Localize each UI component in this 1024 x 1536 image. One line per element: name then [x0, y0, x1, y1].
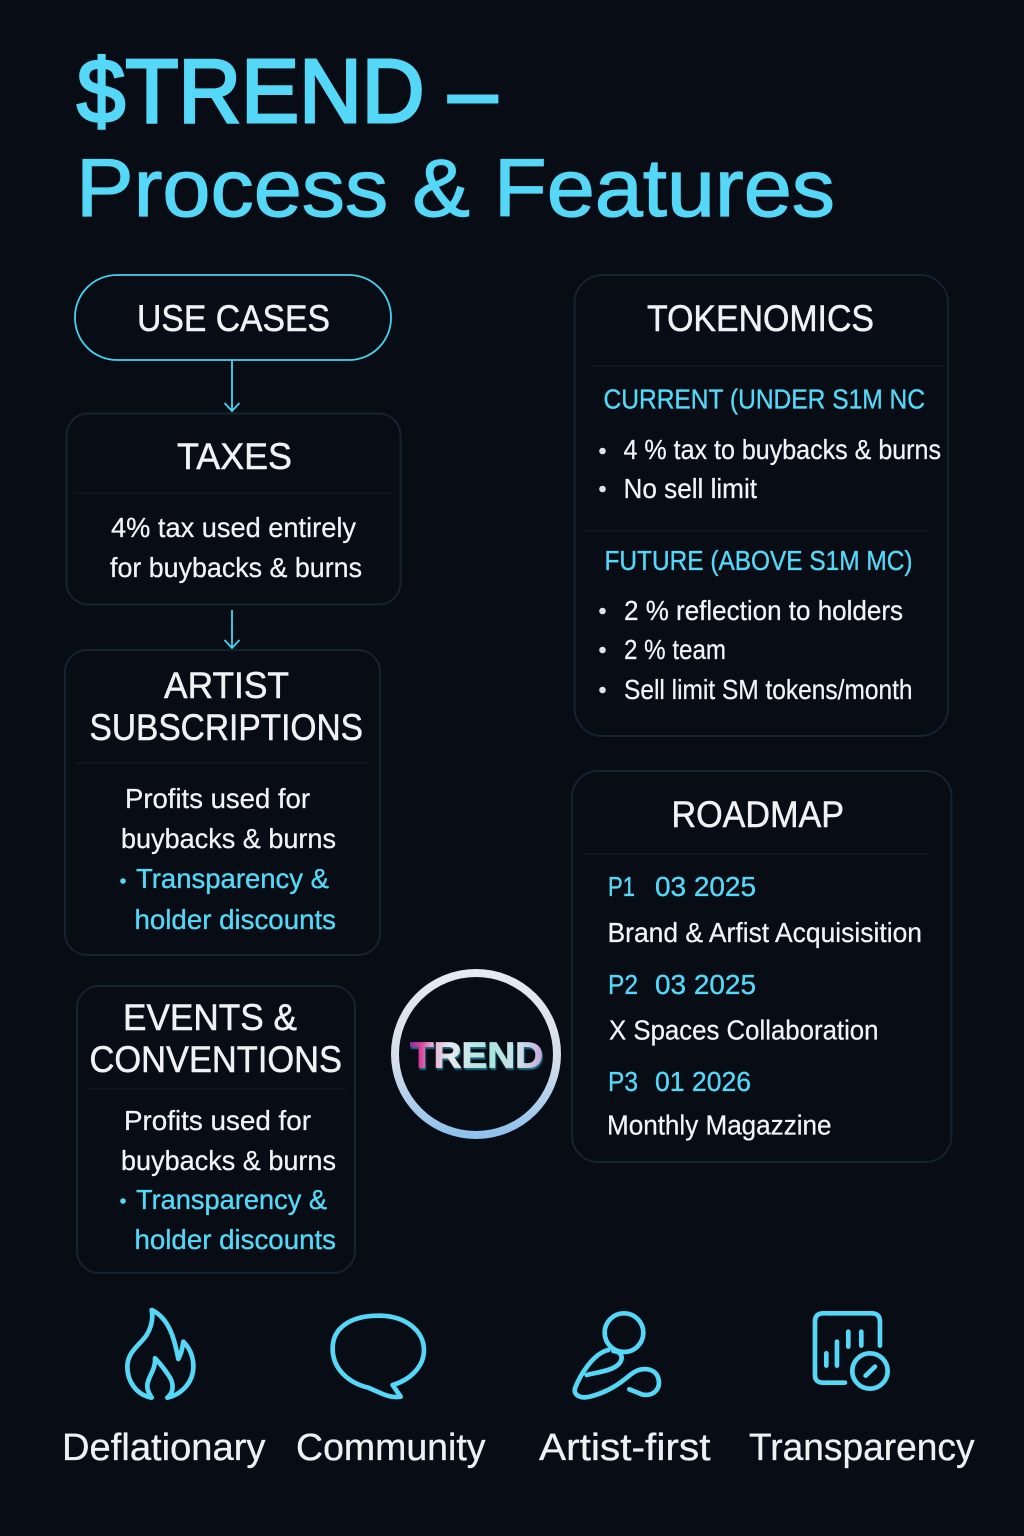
list: future: 2 % reflection to holders	[624, 595, 903, 626]
text: events transparency	[120, 1184, 336, 1255]
heading: events and conventions	[90, 997, 342, 1080]
phase 3: Monthly Magazzine	[607, 1110, 832, 1140]
phase 1	[608, 871, 922, 948]
text: events transparency: Transparency &	[136, 1184, 327, 1215]
heading: roadmap: ROADMAP	[672, 794, 844, 835]
text: events profits: buybacks & burns	[121, 1145, 336, 1176]
heading: events and conventions: EVENTS &	[123, 997, 297, 1038]
heading: events and conventions: CONVENTIONS	[90, 1039, 342, 1080]
text: artist profits: Profits used for	[125, 783, 310, 814]
feature: deflationary: Deflationary	[62, 1427, 266, 1469]
title: $TREND –	[77, 42, 498, 142]
list: current: No sell limit	[624, 473, 757, 504]
use cases pill: USE CASES	[137, 298, 330, 339]
feature: transparency: Transparency	[749, 1427, 974, 1469]
arrow: taxes to artist subscriptions	[224, 610, 240, 648]
text: artist transparency: holder discounts	[134, 904, 336, 935]
panel: tokenomics	[574, 275, 948, 736]
icon: chart with gauge	[815, 1313, 888, 1389]
text: taxes description	[110, 512, 362, 583]
icon: speech bubble	[333, 1316, 424, 1397]
phase 2: P2	[608, 969, 638, 1000]
phase 3: 01 2026	[655, 1066, 751, 1097]
phase 2: X Spaces Collaboration	[609, 1014, 878, 1046]
feature: transparency	[749, 1313, 974, 1469]
list: future: 2 % team	[624, 634, 726, 665]
list: future: Sell limit SM tokens/month	[624, 674, 912, 705]
text: events transparency: holder discounts	[134, 1224, 336, 1255]
subheading: current: CURRENT (UNDER S1M NC	[604, 384, 925, 414]
text: artist profits	[121, 783, 336, 854]
feature: artist-first	[539, 1313, 711, 1469]
phase 1: Brand & Arfist Acquisisition	[608, 917, 922, 948]
heading: artist subscriptions	[90, 665, 363, 748]
title	[76, 42, 835, 234]
feature: artist-first: Artist-first	[539, 1427, 711, 1469]
phase 1: 03 2025	[655, 871, 756, 902]
text: taxes description: for buybacks & burns	[110, 552, 362, 583]
text: taxes description: 4% tax used entirely	[111, 512, 356, 543]
phase 1: P1	[608, 871, 635, 902]
phase 2: 03 2025	[655, 969, 756, 1000]
arrow: use cases to taxes	[224, 360, 240, 411]
panel: taxes	[66, 414, 400, 604]
phase 2	[608, 969, 878, 1046]
text: artist profits: buybacks & burns	[121, 823, 336, 854]
text: events profits	[121, 1105, 336, 1176]
feature: community: Community	[296, 1427, 486, 1469]
panel: events and conventions	[77, 986, 355, 1273]
heading: artist subscriptions: ARTIST	[164, 665, 289, 706]
logo: trend badge	[395, 973, 557, 1135]
text: artist transparency	[120, 863, 336, 935]
subheading: future: FUTURE (ABOVE S1M MC)	[604, 545, 912, 576]
phase 3	[607, 1066, 832, 1140]
feature: deflationary	[62, 1310, 266, 1469]
text: artist transparency: Transparency &	[136, 863, 329, 894]
list: current: 4 % tax to buybacks & burns	[624, 434, 941, 465]
heading: artist subscriptions: SUBSCRIPTIONS	[90, 707, 363, 748]
icon: flame	[127, 1310, 193, 1398]
logo: trend badge: TREND	[410, 1034, 543, 1076]
title: Process & Features	[76, 143, 835, 234]
panel: roadmap	[572, 771, 952, 1162]
text: events profits: Profits used for	[124, 1105, 311, 1136]
list: future	[599, 595, 912, 705]
feature: community	[296, 1316, 486, 1469]
list: current	[599, 434, 941, 504]
phase 3: P3	[608, 1066, 638, 1097]
panel: artist subscriptions	[65, 650, 380, 955]
use cases pill	[75, 275, 391, 360]
heading: taxes: TAXES	[177, 436, 292, 477]
icon: artist	[575, 1313, 659, 1397]
heading: tokenomics: TOKENOMICS	[647, 298, 874, 339]
